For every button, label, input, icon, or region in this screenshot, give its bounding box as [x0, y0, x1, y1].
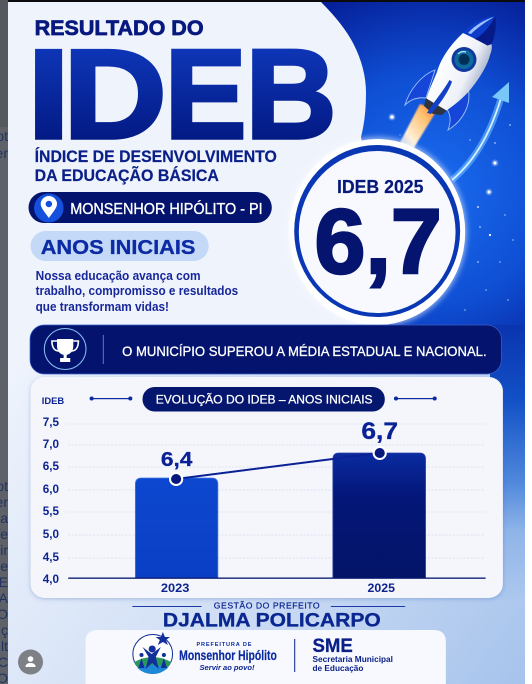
stars — [388, 114, 514, 311]
prefeitura wordmark: Monsenhor Hipólito — [179, 647, 277, 663]
score value: 6,7 — [315, 190, 442, 293]
subtitle: DA EDUCAÇÃO BÁSICA — [35, 165, 219, 185]
SME wordmark — [313, 636, 393, 673]
y axis labels: 4,0 — [43, 573, 59, 586]
y axis labels: 6,0 — [43, 483, 59, 496]
heading ornaments — [90, 396, 437, 400]
y axis labels: 7,0 — [43, 438, 59, 451]
value 2023: 6,4 — [161, 449, 193, 471]
y axis labels: 6,5 — [43, 460, 60, 473]
mayor name: DJALMA POLICARPO — [163, 610, 381, 631]
browser side strip: ir — [0, 542, 8, 558]
browser side strip: e — [0, 558, 8, 574]
location pill — [29, 192, 272, 223]
subtitle: ÍNDICE DE DESENVOLVIMENTO — [35, 147, 277, 166]
icon: map pin — [34, 194, 64, 222]
score circle — [288, 137, 467, 327]
icon: avatar — [18, 650, 43, 674]
panel: bar chart — [31, 377, 503, 598]
rocket flame — [396, 104, 437, 156]
banner text: O MUNICÍPIO SUPEROU A MÉDIA ESTADUAL E NACIONAL. — [122, 344, 487, 359]
SME wordmark: Secretaria Municipal — [313, 655, 393, 664]
paragraph: Nossa educação avança com — [36, 269, 201, 283]
prefeitura wordmark: PREFEITURA DE — [196, 642, 252, 648]
SME wordmark: SME — [313, 636, 353, 657]
title: resultado do: RESULTADO DO — [35, 17, 204, 40]
value 2025: 6,7 — [361, 418, 398, 445]
panel: logos — [86, 630, 446, 684]
axis line — [68, 578, 486, 579]
location name: MONSENHOR HIPÓLITO - PI — [70, 199, 263, 218]
subtitle — [35, 147, 277, 185]
paragraph — [36, 269, 238, 314]
data point 2023 — [170, 473, 182, 485]
browser side strip — [0, 0, 9, 684]
paragraph: que transformam vidas! — [36, 300, 169, 314]
icon: rocket — [396, 16, 496, 156]
title: IDEB: E — [165, 23, 246, 165]
axis title: IDEB — [42, 396, 65, 406]
y axis labels: 7,5 — [43, 416, 60, 429]
y axis labels: 5,0 — [43, 528, 59, 541]
trend line — [176, 453, 380, 479]
chart heading pill — [143, 387, 385, 412]
banner — [30, 325, 501, 374]
bar 2023 — [135, 478, 218, 578]
x axis labels — [161, 582, 396, 595]
icon: city crest — [133, 632, 173, 674]
prefeitura wordmark — [179, 642, 277, 672]
credit label: GESTÃO DO PREFEITO — [214, 601, 320, 610]
paragraph: trabalho, compromisso e resultados — [36, 284, 238, 298]
browser side strip: lt — [1, 638, 8, 654]
icon: trophy — [44, 328, 86, 370]
anos iniciais pill: ANOS INICIAIS — [41, 237, 195, 259]
SME wordmark: de Educação — [313, 664, 363, 673]
data point 2025 — [374, 447, 386, 459]
y axis labels: 5,5 — [43, 505, 60, 518]
title: IDEB: D — [63, 23, 167, 165]
y axis labels — [43, 416, 60, 586]
x axis labels: 2025 — [367, 582, 396, 595]
title: IDEB: B — [246, 23, 336, 165]
bar 2025 — [333, 453, 426, 578]
browser side strip: ç — [1, 622, 8, 638]
icon: growth arrow — [452, 82, 509, 180]
title: IDEB: I — [27, 23, 70, 165]
score label: IDEB 2025 — [337, 177, 423, 197]
top black bar — [8, 0, 525, 2]
anos iniciais pill — [31, 231, 209, 261]
y axis labels: 4,5 — [43, 551, 60, 564]
x axis labels: 2023 — [161, 582, 190, 595]
chart heading pill: EVOLUÇÃO DO IDEB – ANOS INICIAIS — [156, 394, 373, 406]
prefeitura wordmark: Servir ao povo! — [200, 665, 255, 672]
mayor credit — [132, 601, 405, 631]
